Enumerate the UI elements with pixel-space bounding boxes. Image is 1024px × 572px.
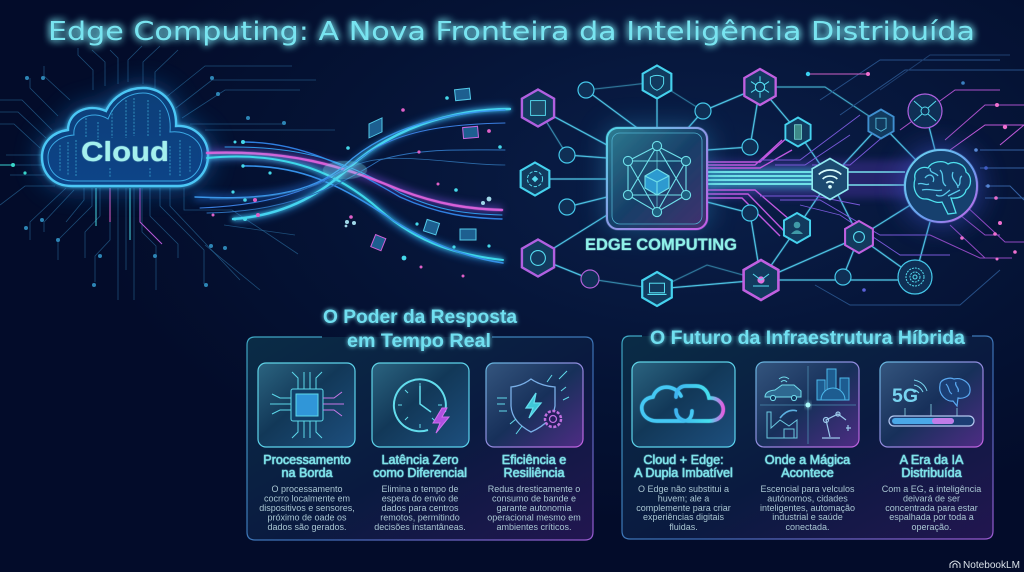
text: conectada. xyxy=(785,522,830,532)
icon: cpu xyxy=(270,372,344,438)
heading xyxy=(765,453,850,480)
title: Edge Computing: A Nova Fronteira da Inteligência Distribuída xyxy=(48,17,975,47)
node: chip xyxy=(522,90,554,126)
right circuit traces xyxy=(808,55,1024,305)
node: hub xyxy=(744,69,776,105)
node: wifi xyxy=(812,158,848,200)
crossing glow xyxy=(323,161,367,179)
text: O Edge não substitui a xyxy=(638,484,729,494)
text xyxy=(882,484,981,532)
icon: robot arm xyxy=(822,412,851,438)
icon: brain outline xyxy=(914,162,970,214)
heading: A Dupla Imbatível xyxy=(634,466,733,480)
heading xyxy=(263,453,351,480)
heading: Acontece xyxy=(781,466,834,480)
icon: edge mesh xyxy=(623,141,691,217)
glowing endpoints xyxy=(806,72,1017,292)
text: próximo de oade os xyxy=(267,512,347,522)
Edge Computing label: EDGE COMPUTING xyxy=(585,235,737,254)
node: dial xyxy=(522,240,554,276)
heading: como Diferencial xyxy=(373,466,467,480)
card: where the magic happens xyxy=(756,362,859,532)
node: camera xyxy=(845,221,873,253)
text: operacional mesmo em xyxy=(487,512,581,522)
circle node: fingerprint xyxy=(898,260,932,294)
heading: Resiliência xyxy=(504,466,564,480)
text: dados para centros xyxy=(381,503,459,513)
heading: A Era da IA xyxy=(900,453,964,467)
text: decisões instantâneas. xyxy=(374,522,466,532)
circle nodes xyxy=(559,82,851,288)
node: mesh xyxy=(744,260,778,300)
text: Elimina o tempo de xyxy=(381,484,459,494)
text: ambientes críticos. xyxy=(496,522,572,532)
glow star xyxy=(806,402,810,408)
text: O processamento xyxy=(271,484,343,494)
card: efficiency xyxy=(486,363,583,532)
icon: factory xyxy=(767,410,797,438)
text: dados são gerados. xyxy=(267,522,347,532)
central beam xyxy=(705,115,950,255)
left section heading: em Tempo Real xyxy=(347,330,491,352)
circuit traces around the cloud xyxy=(0,46,335,300)
icon: linked clouds xyxy=(642,386,723,421)
text: fluidas. xyxy=(669,522,698,532)
card: processing at the edge xyxy=(258,363,355,532)
text: Com a EG, a inteligência xyxy=(882,484,981,494)
Edge Computing central box xyxy=(607,128,707,229)
heading: Eficiência e xyxy=(502,453,566,467)
text xyxy=(259,484,355,532)
icon: signal arcs xyxy=(914,380,927,393)
text: cocrro localmente em xyxy=(264,494,350,504)
text xyxy=(636,484,731,532)
card: cloud + edge xyxy=(632,362,735,532)
text: espalhada por toda a xyxy=(889,512,974,522)
circle node: network badge xyxy=(908,94,942,128)
node: gauge xyxy=(521,162,549,196)
node: laptop xyxy=(642,272,672,306)
heading xyxy=(634,453,733,480)
heading: Processamento xyxy=(263,453,351,467)
cloud xyxy=(42,88,208,186)
text: Redus dresticamente o xyxy=(488,484,580,494)
node: sensor xyxy=(785,118,811,146)
circuit accent traces xyxy=(0,165,162,244)
stream glow xyxy=(195,109,510,260)
text: remotos, permitindo xyxy=(380,512,460,522)
text: operação. xyxy=(911,522,952,532)
text xyxy=(374,484,466,532)
node: shield xyxy=(643,66,671,98)
text: garante autonomia xyxy=(496,503,572,513)
panel: real-time response xyxy=(247,337,593,540)
text: Escencial para velculos xyxy=(760,484,855,494)
text: concentrada para estar xyxy=(885,503,978,513)
node: device xyxy=(868,110,894,138)
circuit nodes xyxy=(11,76,286,287)
cloud data columns xyxy=(60,98,190,178)
icon: router bar xyxy=(889,404,974,426)
icon: city xyxy=(817,369,849,400)
left section heading: O Poder da Resposta xyxy=(323,306,517,328)
icon: car xyxy=(765,377,801,401)
text: autónomos, cidades xyxy=(767,494,848,504)
network links xyxy=(535,82,941,289)
text: complemente para criar xyxy=(636,503,731,513)
text: consumo de bande e xyxy=(492,494,576,504)
heading xyxy=(900,453,964,480)
text: experiências digitais xyxy=(643,512,725,522)
heading xyxy=(502,453,566,480)
heading: Distribuída xyxy=(901,466,962,480)
data particles xyxy=(212,96,502,278)
left section heading xyxy=(323,306,517,352)
node: person xyxy=(784,213,810,243)
icon: brain xyxy=(940,378,970,406)
icon: shield with gear xyxy=(497,371,569,434)
floating data cards xyxy=(369,88,478,251)
text: huvem; ale a xyxy=(658,494,709,504)
text: industrial e saúde xyxy=(772,512,843,522)
text: dispositivos e sensores, xyxy=(259,503,355,513)
heading: Onde a Mágica xyxy=(765,453,850,467)
data streams xyxy=(195,109,510,263)
text: inteligentes, automação xyxy=(760,503,855,513)
text: deivará de ser xyxy=(903,494,960,504)
cloud label: Cloud xyxy=(81,136,169,167)
heading: Latência Zero xyxy=(381,453,459,467)
heading: na Borda xyxy=(281,466,333,480)
hexagon nodes xyxy=(521,66,894,306)
heading xyxy=(373,453,467,480)
brain xyxy=(903,148,979,224)
panel: hybrid infrastructure xyxy=(622,327,993,539)
icon: clock xyxy=(394,379,449,433)
watermark: NotebookLM: NotebookLM xyxy=(963,559,1020,571)
card: distributed AI xyxy=(880,362,983,532)
heading: Cloud + Edge: xyxy=(643,453,724,467)
right section heading: O Futuro da Infraestrutura Híbrida xyxy=(650,327,965,349)
text xyxy=(487,484,581,532)
5G label: 5G xyxy=(892,386,918,407)
text: espera do envio de xyxy=(382,494,458,504)
card: zero latency xyxy=(372,363,469,532)
text xyxy=(760,484,855,532)
